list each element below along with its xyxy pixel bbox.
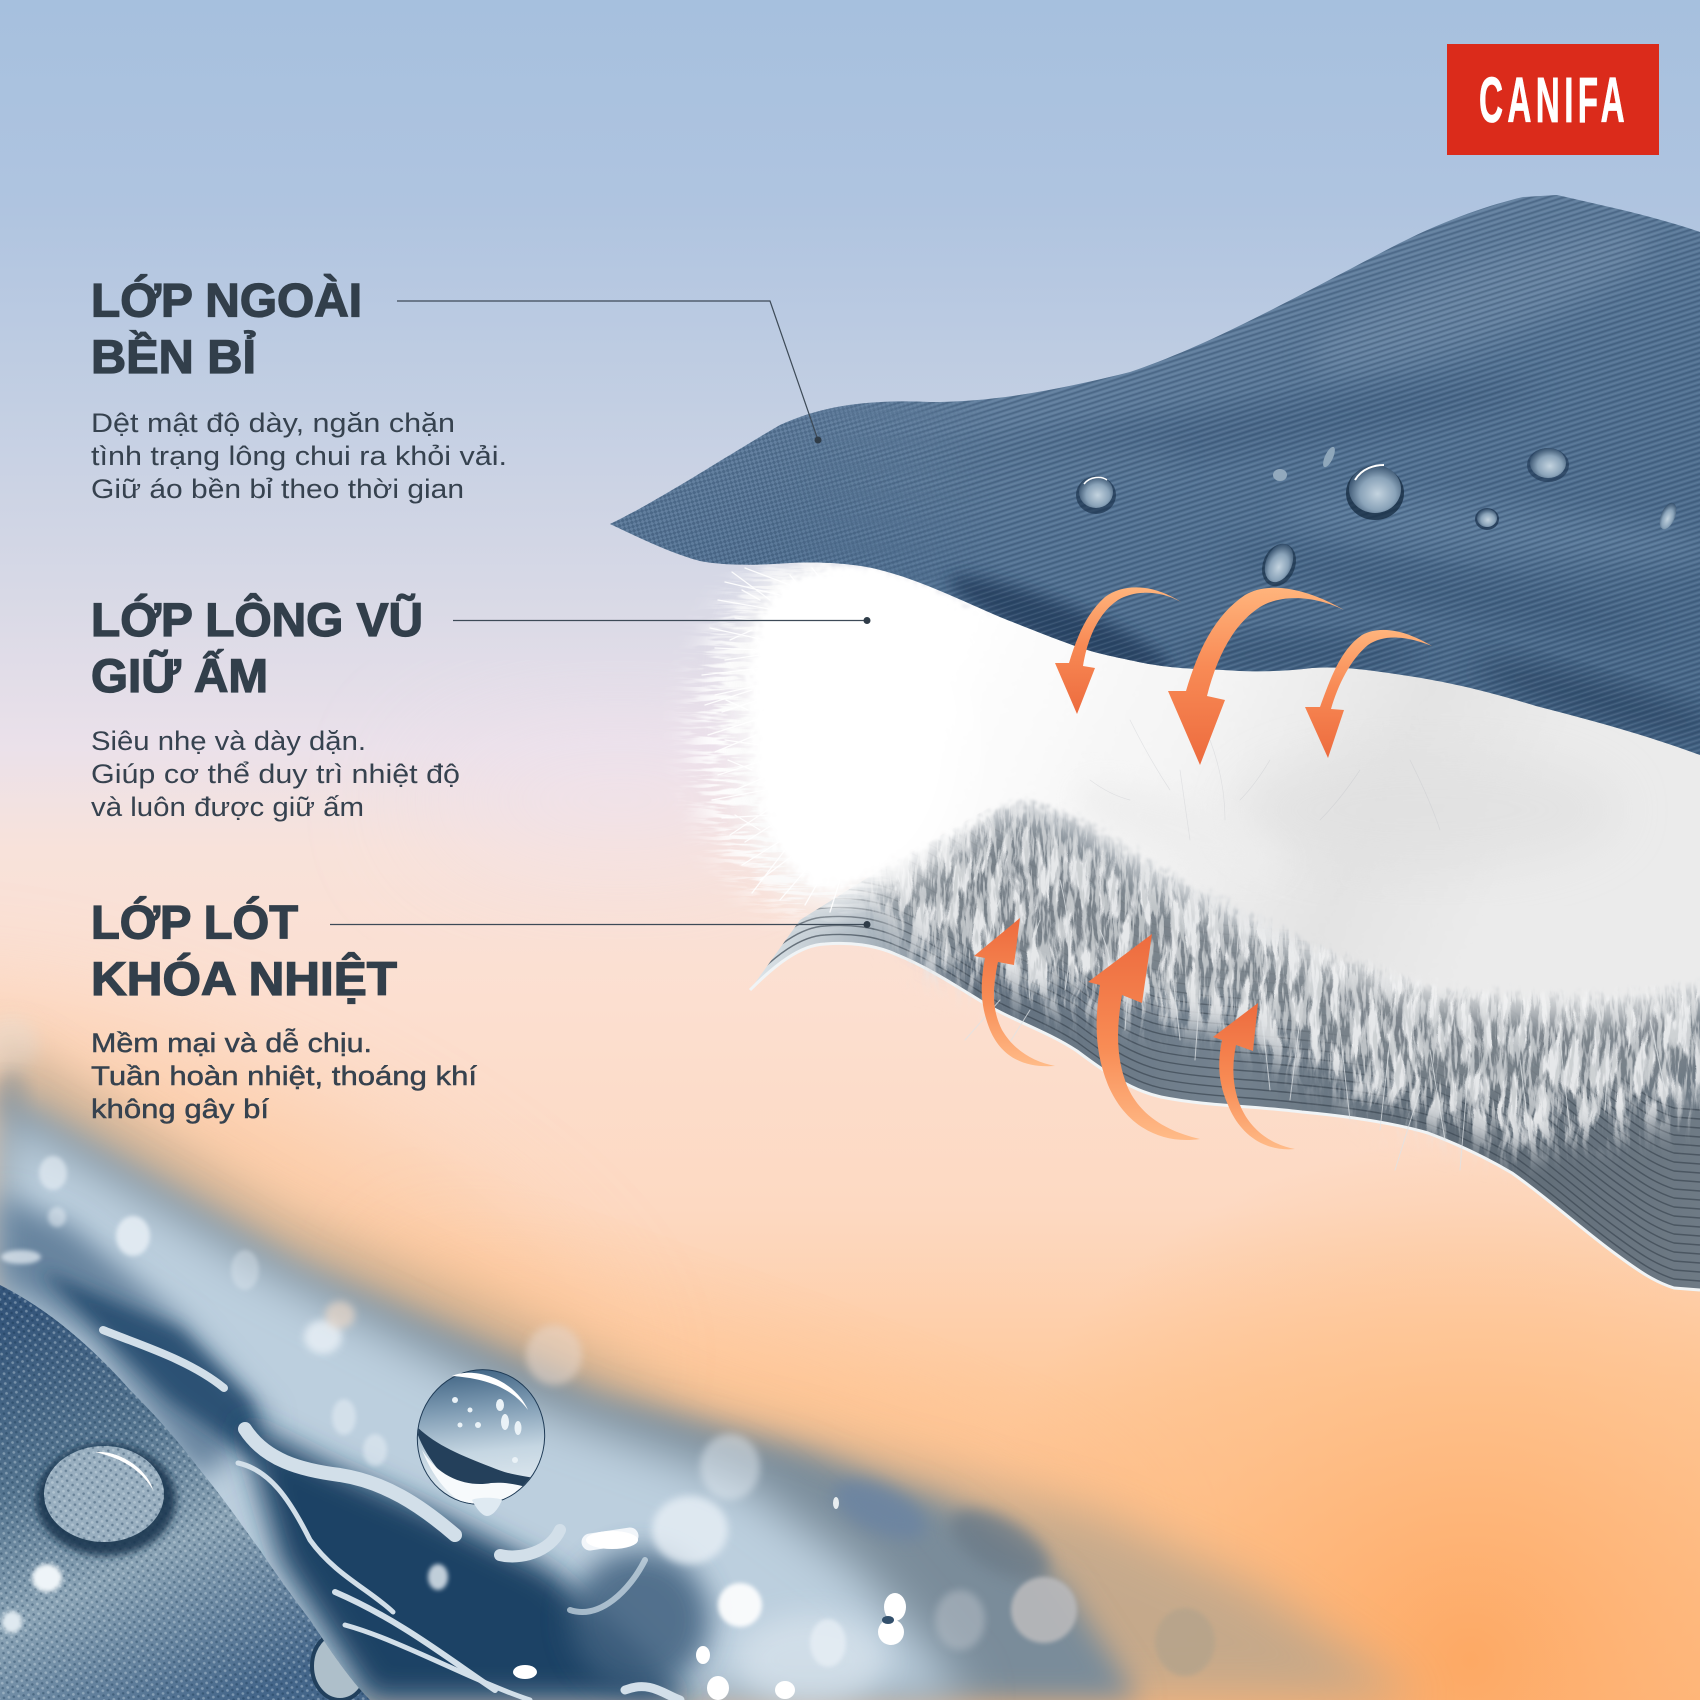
- droplet: [1076, 476, 1116, 514]
- leader line: [453, 617, 870, 624]
- droplet: [1273, 469, 1287, 481]
- description: tình trạng lông chui ra khỏi vải.: [91, 441, 507, 471]
- description: Giúp cơ thể duy trì nhiệt độ: [91, 759, 460, 789]
- feather strands: [702, 568, 1665, 1170]
- description: Mềm mại và dễ chịu.: [91, 1027, 372, 1058]
- heading: GIỮ ẤM: [91, 649, 268, 702]
- callout: lining layer: [91, 896, 870, 1124]
- leader line: [397, 301, 822, 444]
- droplet: [1656, 500, 1680, 532]
- arrow: [1213, 1003, 1295, 1149]
- droplet: [1321, 445, 1337, 469]
- leader line: [330, 921, 870, 928]
- description: Siêu nhẹ và dày dặn.: [91, 726, 366, 756]
- heading: [91, 274, 362, 383]
- description: [91, 726, 460, 822]
- droplet: [1256, 539, 1302, 591]
- CANIFA logo: [1447, 44, 1659, 155]
- description: [91, 408, 507, 504]
- left feather fringe: [693, 560, 917, 910]
- callout: outer layer: [91, 274, 822, 504]
- description: [91, 1027, 478, 1124]
- arrow: [1055, 587, 1181, 714]
- heading: BỀN BỈ: [91, 330, 256, 383]
- foreground fabric: [0, 1280, 380, 1700]
- heat arrows pointing down: [1055, 587, 1432, 765]
- photo: water splash on fabric: [0, 1015, 1420, 1700]
- CANIFA logo: CANIFA: [1479, 64, 1629, 136]
- feather layer: insulating down: [693, 558, 1700, 1170]
- callout: down layer: [91, 593, 870, 822]
- large water droplet: [416, 1369, 546, 1516]
- arrow: [974, 918, 1055, 1066]
- heading: [91, 896, 397, 1005]
- outer layer: water-repellent fabric: [600, 180, 1700, 770]
- heat arrows pointing up: [974, 918, 1295, 1149]
- description: Dệt mật độ dày, ngăn chặn: [91, 408, 455, 438]
- heading: LỚP NGOÀI: [91, 274, 362, 326]
- bokeh droplets: [1, 1156, 1215, 1700]
- heading: LỚP LÔNG VŨ: [91, 593, 423, 646]
- heading: [91, 593, 423, 702]
- droplet: [1346, 465, 1404, 520]
- droplet: [1475, 508, 1499, 530]
- arrow: [1088, 934, 1200, 1140]
- fabric droplet: [36, 1444, 176, 1556]
- arrow: [1168, 588, 1344, 765]
- heading: LỚP LÓT: [91, 896, 298, 948]
- description: và luôn được giữ ấm: [91, 792, 364, 822]
- blurred water background: [0, 1015, 1420, 1700]
- description: Giữ áo bền bỉ theo thời gian: [91, 474, 464, 504]
- feather shadow and wisps: [840, 800, 1700, 1150]
- water droplets on fabric: [1076, 445, 1680, 591]
- water streaks: [103, 1330, 680, 1700]
- dense white down: [748, 566, 1700, 996]
- arrow: [1305, 630, 1432, 758]
- lining layer: heat-locking inner fabric: [740, 763, 1700, 1300]
- description: Tuần hoàn nhiệt, thoáng khí: [91, 1061, 478, 1091]
- heading: KHÓA NHIỆT: [91, 952, 397, 1005]
- description: không gây bí: [91, 1094, 270, 1124]
- droplet: [1527, 448, 1569, 482]
- soft halo of down: [728, 558, 1700, 1018]
